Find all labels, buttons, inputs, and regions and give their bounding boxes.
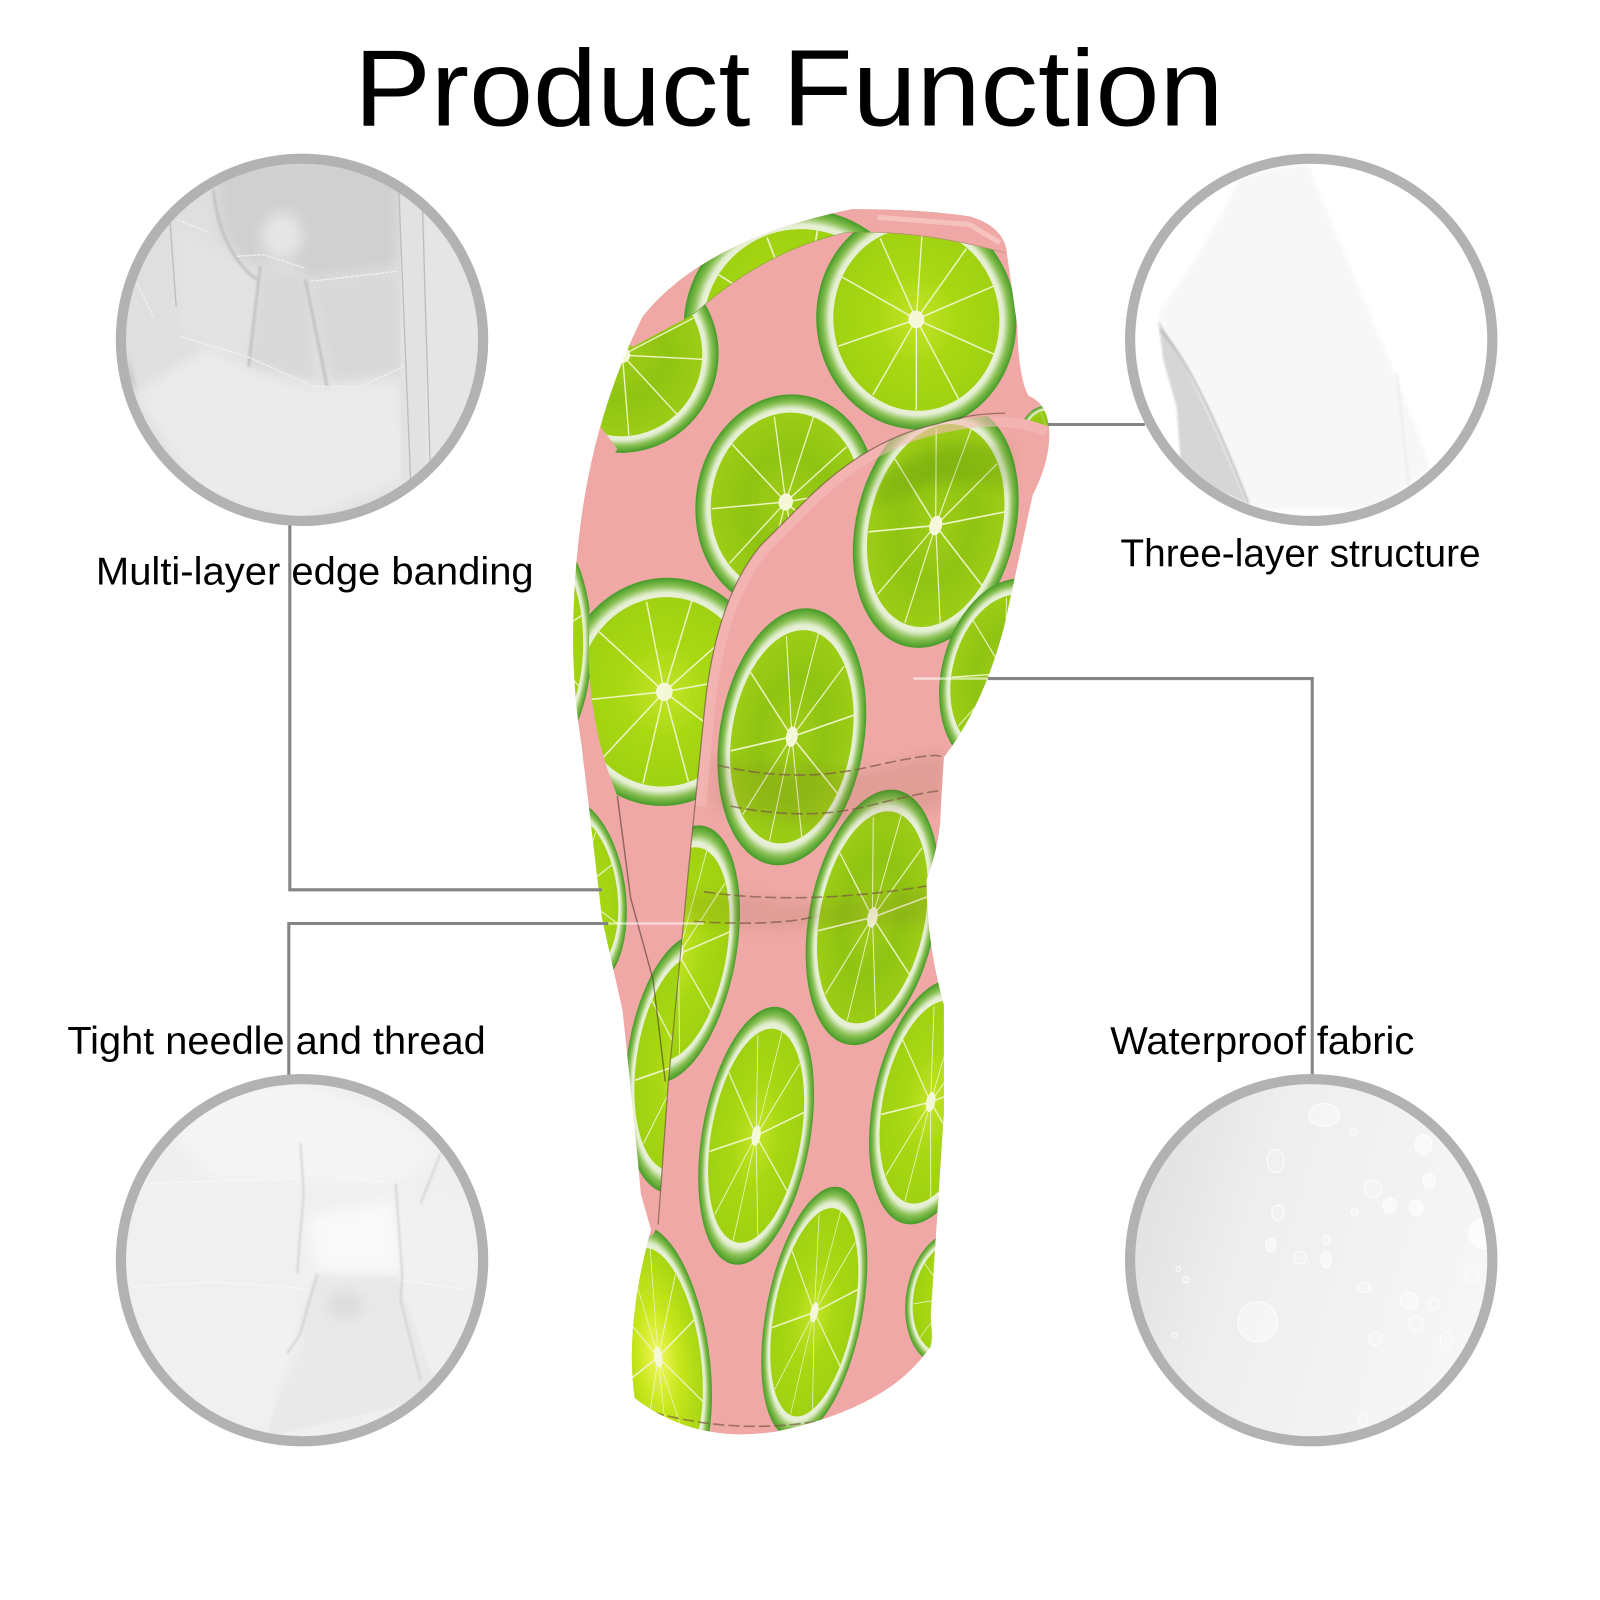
panel: waterproof fabric detail <box>1130 1079 1499 1441</box>
lime slice: back lower <box>627 938 682 1192</box>
title: Product Function <box>354 28 1223 149</box>
lime slice: shoulder <box>1024 406 1050 462</box>
lime slice: lower centre <box>698 1006 814 1265</box>
lime slice: upper left <box>594 278 719 453</box>
panel: three-layer structure detail <box>1130 159 1492 521</box>
product: golf head cover <box>573 209 1050 1434</box>
panel: tight needle and thread detail <box>121 1079 483 1441</box>
left side panel <box>573 426 618 796</box>
back panel <box>573 209 1050 1434</box>
connector: three-layer structure <box>1048 423 1145 426</box>
lime slice: front centre <box>717 608 866 866</box>
stitched folds <box>130 1083 477 1437</box>
leather folds <box>120 159 491 523</box>
label: waterproof fabric: Waterproof fabric <box>1110 1020 1414 1063</box>
lime slice: waist right <box>806 790 936 1046</box>
lime slice: front right edge <box>939 578 1014 746</box>
lime slice: left large <box>573 578 729 806</box>
connector: waterproof fabric <box>988 679 1312 1077</box>
lime slice: top right <box>816 210 1016 430</box>
water droplets <box>1172 1104 1499 1426</box>
label: multi-layer edge banding: Multi-layer edge banding <box>96 551 534 594</box>
seam highlight <box>696 417 1048 806</box>
panel: multi-layer edge banding detail <box>120 159 491 523</box>
lime slice: bottom left bright <box>632 1230 712 1432</box>
lime slice: front lower left <box>668 825 740 1081</box>
fabric edge shape <box>1158 320 1411 504</box>
lime slice: bottom right <box>905 1238 936 1357</box>
seam line <box>658 413 1005 1224</box>
stitches <box>653 755 941 1426</box>
lime slice: middle <box>695 394 868 592</box>
lime slice: left sliver <box>573 561 590 721</box>
lime slice: top band rim <box>684 214 871 320</box>
lime slice: front top <box>852 416 1019 648</box>
pleat shading <box>714 753 944 827</box>
label: tight needle and thread: Tight needle and thread <box>67 1020 486 1063</box>
front panel <box>632 416 1050 1434</box>
lime slice: bottom centre <box>761 1186 868 1431</box>
connector: multi-layer edge banding <box>290 523 602 890</box>
connector highlight on product <box>608 679 988 923</box>
lime slice: left lower <box>588 807 627 970</box>
top band <box>630 209 1007 347</box>
shadow on front top lime <box>878 443 1010 510</box>
connector: tight needle and thread <box>289 923 608 1077</box>
lime slice: lower right <box>869 982 944 1224</box>
label: three-layer structure: Three-layer structure <box>1120 532 1481 575</box>
